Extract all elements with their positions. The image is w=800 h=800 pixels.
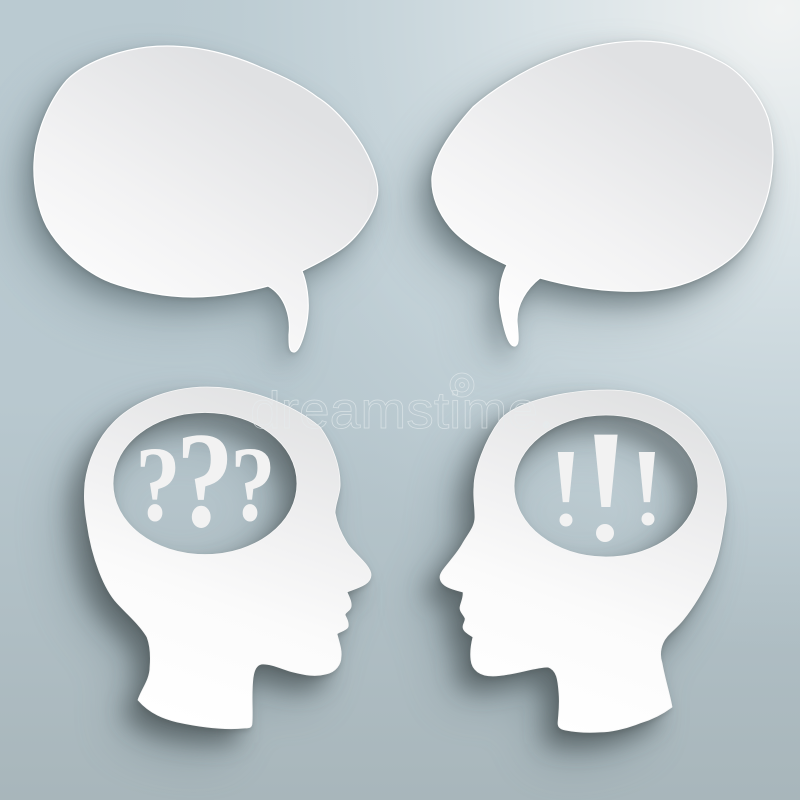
question marks: ? — [135, 426, 181, 544]
exclamation marks: ! — [629, 427, 665, 550]
exclamation marks: ! — [548, 427, 584, 550]
question marks: ? — [230, 426, 276, 544]
head: right, with exclamation marks — [416, 390, 726, 758]
head: left, with question marks — [60, 387, 371, 755]
watermark wordmark: dreamstime — [250, 382, 538, 440]
question marks: ? — [176, 404, 234, 556]
watermark registered mark: ® — [543, 420, 550, 430]
speech bubble: right — [412, 41, 773, 370]
question marks — [135, 404, 276, 556]
exclamation marks — [558, 434, 655, 542]
watermark — [250, 373, 550, 440]
speech bubble: left — [14, 46, 378, 376]
watermark spiral — [450, 373, 474, 397]
exclamation marks: ! — [579, 397, 633, 575]
